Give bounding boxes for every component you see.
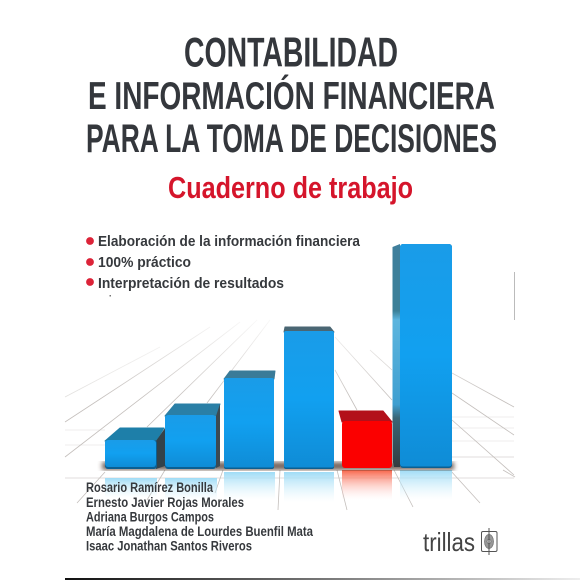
publisher name: trillas bbox=[423, 527, 475, 557]
icon: publisher logo bbox=[482, 528, 497, 555]
bullet list: Elaboración de la información financiera bbox=[98, 233, 361, 250]
bar reflections bbox=[105, 470, 452, 502]
red bar bbox=[339, 411, 392, 468]
bullet list: Interpretación de resultados bbox=[98, 275, 284, 292]
title: CONTABILIDAD bbox=[184, 28, 398, 76]
authors: Rosario Ramírez Bonilla bbox=[86, 480, 213, 495]
grid fade bbox=[60, 310, 516, 400]
right edge mark bbox=[514, 272, 515, 320]
authors: Isaac Jonathan Santos Riveros bbox=[86, 538, 252, 554]
stray dot bbox=[110, 295, 111, 296]
title bbox=[86, 28, 497, 161]
authors: Adriana Burgos Campos bbox=[86, 510, 214, 524]
bullet list bbox=[86, 233, 361, 292]
bar chart bbox=[105, 244, 452, 469]
bottom rule bbox=[65, 578, 580, 580]
subtitle: Cuaderno de trabajo bbox=[168, 170, 413, 205]
authors: Ernesto Javier Rojas Morales bbox=[86, 495, 244, 510]
authors: María Magdalena de Lourdes Buenfil Mata bbox=[86, 524, 313, 539]
bar 2 bbox=[165, 404, 220, 469]
authors bbox=[86, 480, 313, 554]
bar 3 bbox=[224, 371, 275, 469]
bar 4 bbox=[284, 327, 334, 469]
perspective floor grid bbox=[65, 320, 515, 510]
bullet list: 100% práctico bbox=[98, 254, 191, 271]
bar shadow bbox=[102, 462, 454, 470]
bar 1 bbox=[105, 428, 165, 469]
tall bar bbox=[392, 244, 452, 468]
